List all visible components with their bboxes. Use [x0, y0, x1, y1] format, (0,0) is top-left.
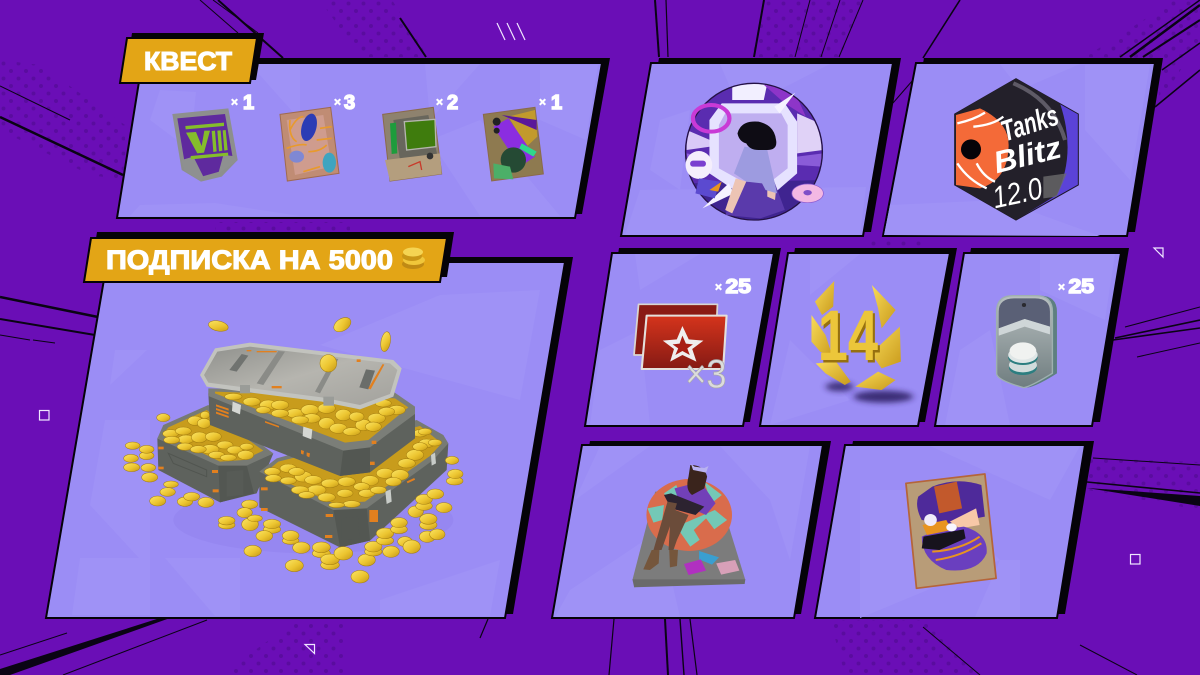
right chest: [259, 420, 448, 547]
label: subscription heading: [84, 232, 454, 282]
text: x2 card: 2: [447, 92, 458, 114]
icon: gold 14 laurel: 14: [818, 295, 878, 376]
panel: boosters x25: [585, 248, 781, 426]
text: x1 card: ×: [539, 95, 546, 109]
panel: avatar: [621, 58, 901, 236]
icon: silver dog tag: [997, 296, 1057, 388]
text: x2 card: [436, 92, 458, 114]
text: x1 shield: [231, 92, 254, 114]
left chest: [157, 405, 273, 502]
text: x25 boosters: 25: [726, 276, 751, 298]
text: x25 tags: 25: [1068, 276, 1094, 298]
panel: purple card: [815, 441, 1094, 618]
text: Tanks Blitz 12.0: 12.0: [989, 172, 1045, 215]
coins scattered on the floor: [124, 315, 463, 583]
text: x1 card: [539, 92, 562, 114]
text: x25 tags: [1058, 276, 1094, 298]
panel: dog tag x25: [935, 248, 1129, 426]
icon: red star cards: [634, 304, 727, 396]
illustration: girl on beanbag on platform: [632, 464, 745, 587]
text: x1 card: 1: [551, 92, 562, 114]
icon: hexagon vinyl badge: [955, 79, 1078, 220]
icon: shield rank VIII: [172, 108, 238, 182]
label: subscription heading: ПОДПИСКА НА 5000: [106, 245, 393, 275]
text: x3 card: ×: [334, 95, 341, 109]
panel: subscription: [46, 257, 573, 618]
icon: gold 14 laurel: 14: [820, 297, 880, 378]
text: x25 boosters: ×: [715, 280, 722, 294]
panel: blitz hex badge: [883, 58, 1163, 236]
icon: card beetles: [280, 107, 339, 181]
text: x2 card: ×: [436, 95, 443, 109]
icon: red star cards: ×3: [685, 352, 727, 396]
illustration: chests of gold coins: [124, 315, 463, 583]
icon: card screen: [383, 107, 442, 181]
panel: 14 laurel: [760, 248, 957, 426]
panel: girl on beanbag: [552, 441, 831, 618]
text: x1 shield: ×: [231, 95, 238, 109]
icon: avatar girl: [686, 82, 823, 220]
text: x25 boosters: [715, 276, 751, 298]
text: Tanks Blitz 12.0: Tanks: [997, 99, 1063, 148]
text: x3 card: [334, 92, 355, 114]
label: quest heading: [120, 33, 264, 83]
text: Tanks Blitz 12.0: [989, 99, 1065, 215]
icon: gold coin stack: [402, 248, 425, 269]
upper chest with lid: [200, 343, 415, 476]
label: quest heading: КВЕСТ: [144, 46, 232, 76]
icon: card purple tank: [483, 107, 543, 181]
text: x25 tags: ×: [1058, 280, 1065, 294]
icon: gold 14 laurel: [811, 281, 913, 403]
text: x1 shield: 1: [243, 92, 254, 114]
panel: quest: [117, 58, 610, 218]
text: Tanks Blitz 12.0: Blitz: [990, 130, 1065, 180]
icon: purple butterfly card: [906, 474, 996, 588]
text: x3 card: 3: [344, 92, 355, 114]
